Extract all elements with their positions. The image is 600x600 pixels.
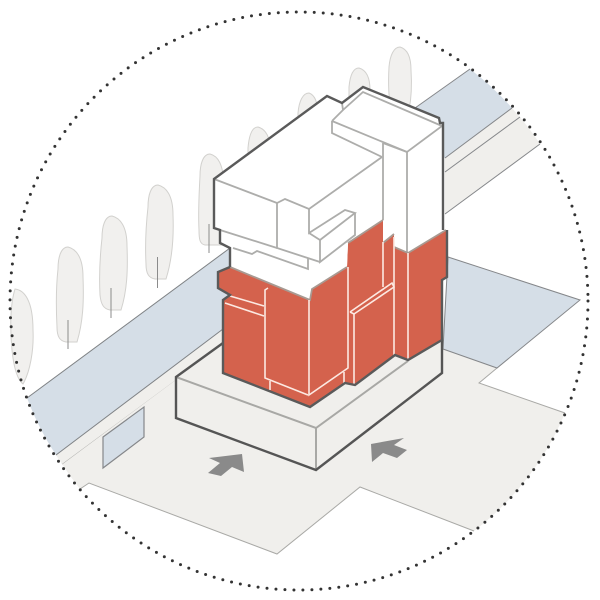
lower right water <box>443 257 580 368</box>
ground outline <box>62 345 565 554</box>
tree trunks <box>68 224 209 349</box>
upper right water band <box>415 69 512 158</box>
building inner lines <box>214 92 446 300</box>
plinth inner edges <box>176 361 408 470</box>
left water band <box>27 248 232 455</box>
upper right road edges <box>415 69 540 214</box>
ground plane <box>62 340 565 554</box>
building outer outline <box>214 87 443 267</box>
arrow: left entrance <box>208 454 244 476</box>
plinth <box>176 340 442 470</box>
plinth top face <box>176 340 442 428</box>
left sidewalk strip <box>56 329 223 464</box>
plinth left face <box>176 377 316 470</box>
plinth outer edges <box>176 340 442 470</box>
plinth right face <box>316 340 442 470</box>
red lower building volume <box>218 220 447 407</box>
small water rectangle <box>103 407 144 468</box>
white upper building volume <box>214 87 443 300</box>
red top edge <box>230 220 446 300</box>
left water edges <box>27 248 230 455</box>
trees <box>11 47 411 384</box>
upper right road strips <box>445 108 540 214</box>
red volume outline <box>218 230 447 407</box>
arrow: right entrance <box>371 438 407 462</box>
white lines on red facade <box>225 237 408 395</box>
